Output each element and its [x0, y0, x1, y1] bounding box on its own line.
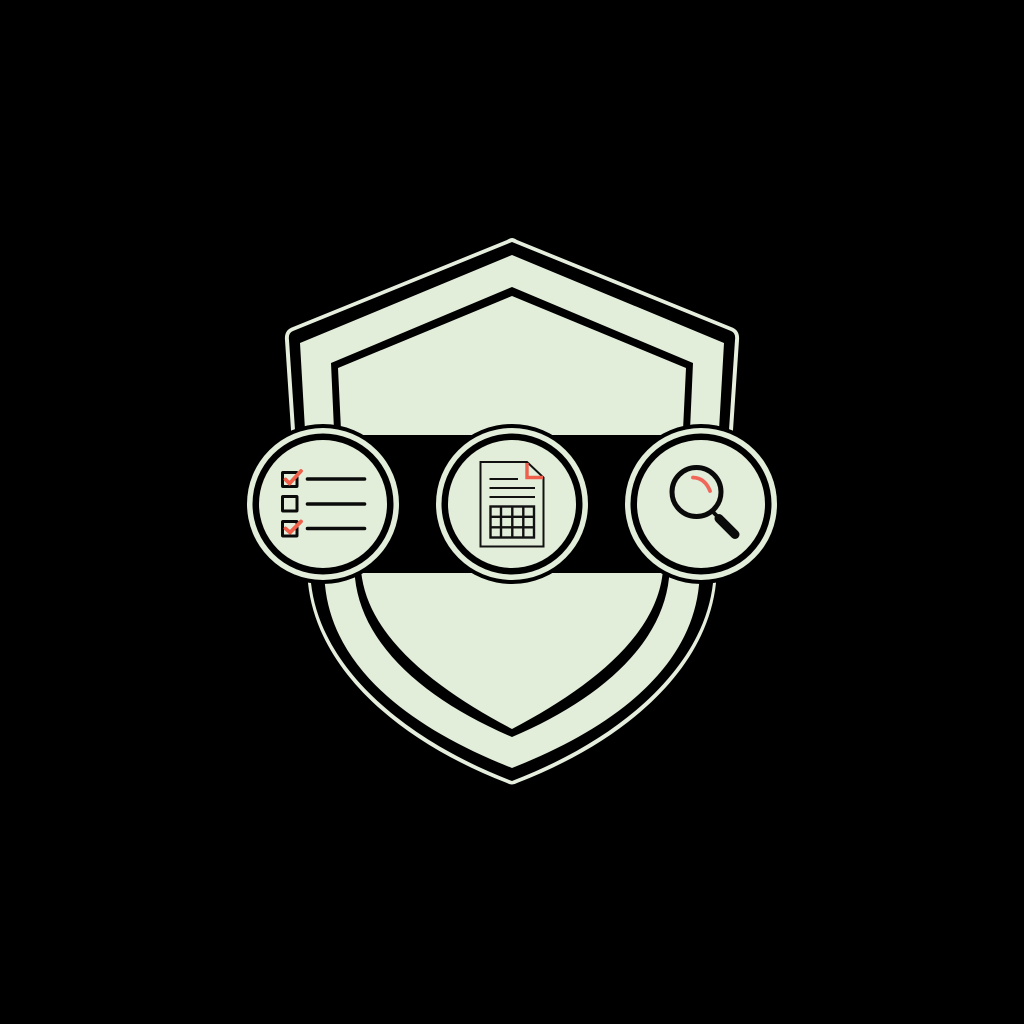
table grid: [490, 506, 534, 538]
badge: document: [432, 424, 592, 584]
empty box: [282, 496, 297, 511]
badge: checklist: [243, 424, 403, 584]
badge: magnifier: [621, 424, 781, 584]
shield: [285, 238, 739, 784]
line two: [308, 502, 364, 506]
black horizontal band: [330, 435, 694, 573]
checked box two: [282, 522, 301, 536]
line three: [308, 527, 364, 530]
shield outer cream band: [300, 255, 724, 768]
page outline: [480, 462, 544, 546]
badge ring: [432, 424, 592, 584]
icon: magnifying glass: [672, 468, 735, 534]
icon: checklist: [282, 471, 364, 536]
handle: [719, 518, 735, 534]
lens: [672, 468, 721, 516]
neck: [712, 511, 720, 519]
badge ring: [243, 424, 403, 584]
shield inner panel: [338, 296, 686, 729]
icon: document with table: [480, 462, 544, 546]
text lines: [490, 479, 535, 497]
shield inner black line: [331, 287, 693, 737]
shield outer outline: [285, 238, 739, 784]
shield black border: [289, 242, 735, 781]
line one: [308, 477, 364, 481]
lens highlight: [693, 478, 710, 491]
badge ring: [621, 424, 781, 584]
folded corner: [527, 463, 543, 478]
checked box one: [282, 471, 301, 486]
